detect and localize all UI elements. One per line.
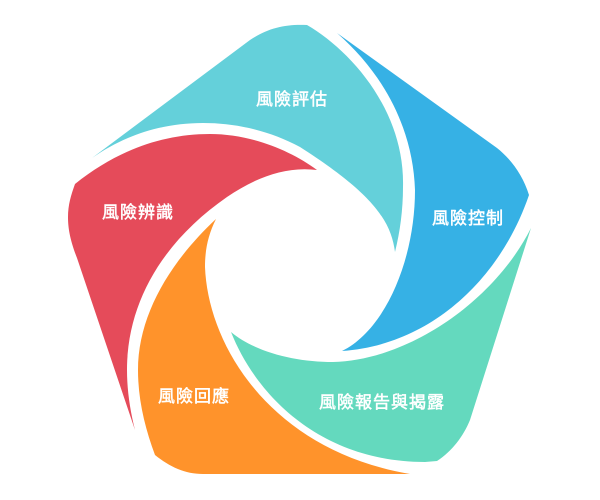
label: risk assessment: 風險評估 — [256, 90, 328, 109]
panel: risk control — [337, 33, 529, 351]
panel: risk assessment — [92, 25, 403, 252]
panel: risk response — [138, 219, 410, 474]
label: risk control: 風險控制 — [432, 209, 504, 228]
label: risk identification: 風險辨識 — [102, 203, 174, 222]
panel: risk identification — [68, 134, 317, 430]
label: risk response: 風險回應 — [158, 386, 230, 406]
panel: risk reporting and disclosure — [231, 228, 531, 462]
label: risk reporting and disclosure: 風險報告與揭露 — [319, 393, 445, 412]
